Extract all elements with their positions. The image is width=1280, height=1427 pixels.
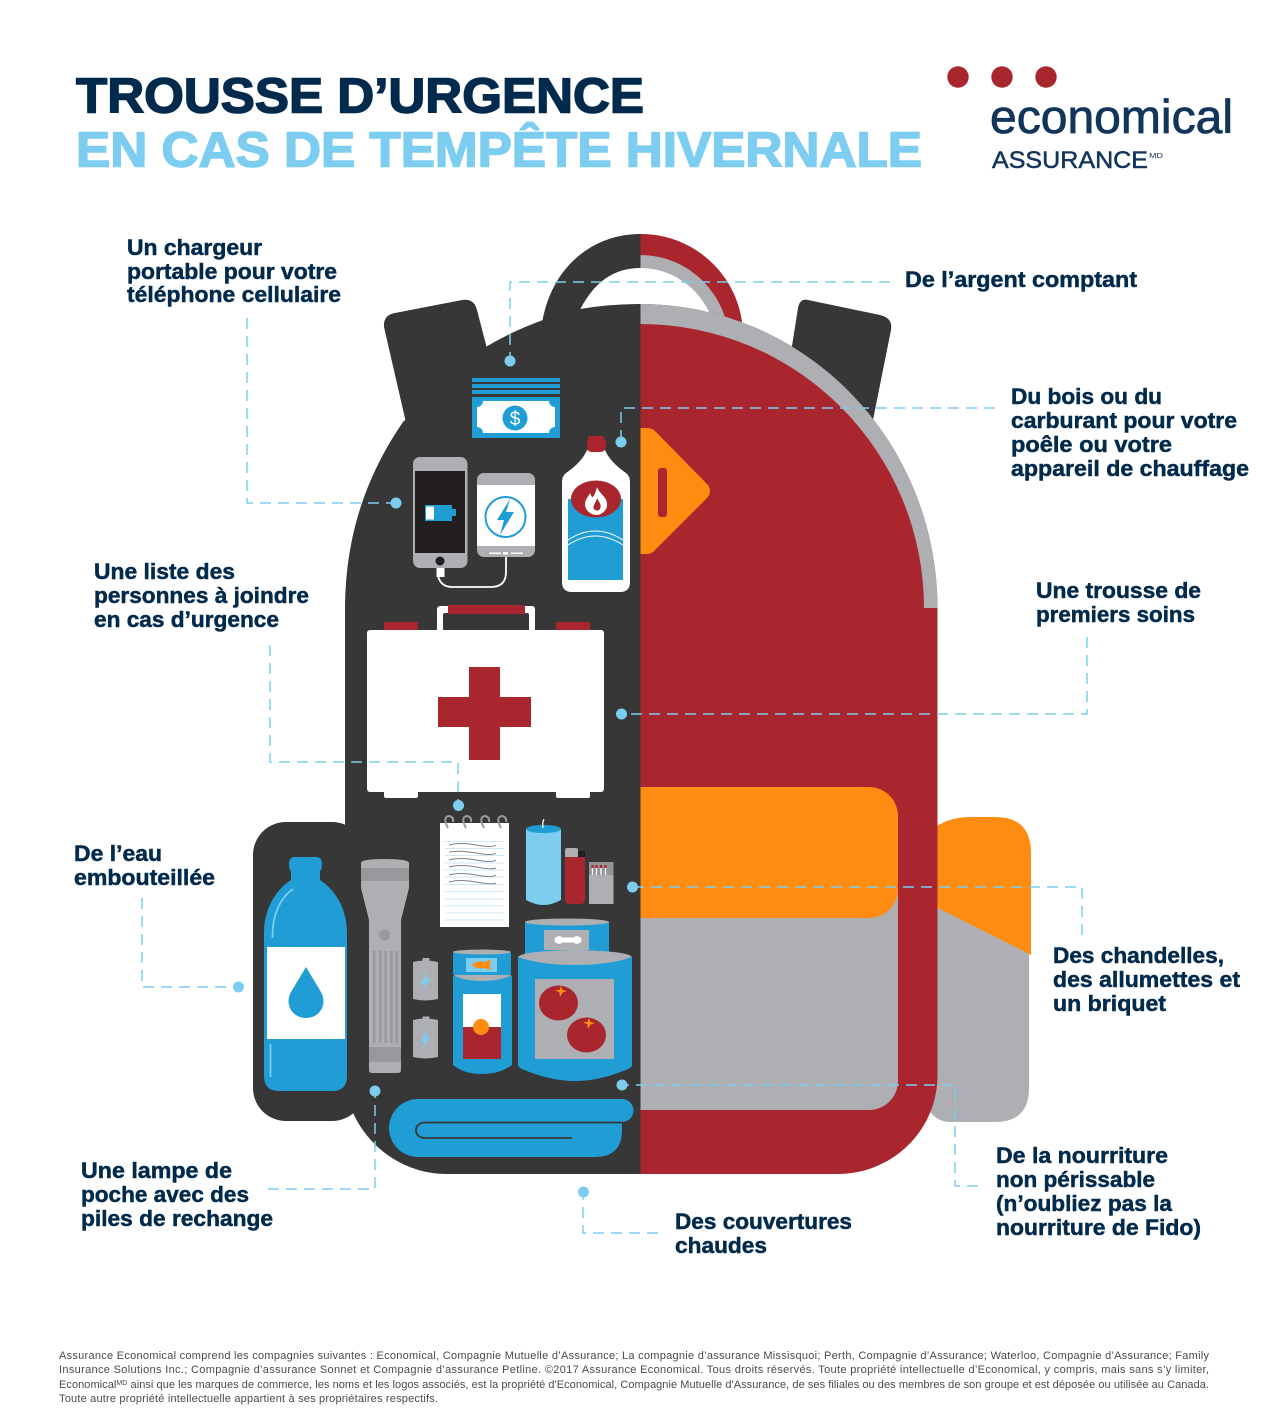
icon: power bank [477, 473, 535, 557]
footer legal text: Economical [59, 1379, 116, 1391]
icon: fish food can [453, 950, 511, 975]
label: bottled water [74, 841, 215, 890]
icon: candle [526, 819, 561, 905]
logo: Economical Assurance [947, 66, 1233, 174]
label: charger: Un chargeur [127, 235, 262, 260]
icon: tomato can [518, 950, 632, 1081]
icon: cash: $ [510, 409, 521, 430]
label: bottled water: embouteillée [74, 865, 215, 890]
icon: batteries [413, 958, 438, 1058]
orange zipper tab [640, 428, 710, 554]
label: charger: téléphone cellulaire [127, 282, 341, 307]
grey top trim [640, 304, 938, 608]
side pocket left [253, 822, 365, 1121]
label: flashlight: poche avec des [81, 1182, 249, 1207]
label: contact list: en cas d’urgence [94, 607, 279, 632]
icon: notepad [440, 816, 509, 927]
icon: matches [589, 862, 614, 904]
label: candles, matches, lighter: des allumettes et [1053, 967, 1241, 992]
icon: soup can [453, 974, 512, 1074]
label: first aid kit [1036, 578, 1201, 627]
label: cash: De l’argent comptant [905, 267, 1138, 292]
label: first aid kit: Une trousse de [1036, 578, 1201, 603]
label: food: De la nourriture [996, 1143, 1168, 1168]
label: blankets: chaudes [675, 1233, 767, 1258]
front pocket [640, 787, 898, 1110]
label: flashlight: piles de rechange [81, 1206, 273, 1231]
title [76, 70, 922, 178]
title: TROUSSE D’URGENCE [76, 70, 644, 124]
icon: first aid kit [367, 605, 604, 798]
label: blankets: Des couvertures [675, 1209, 852, 1234]
label: contact list: personnes à joindre [94, 583, 309, 608]
label: blankets [675, 1209, 852, 1258]
icon: lighter [565, 848, 585, 904]
icon: charging cable [436, 553, 506, 587]
label: food: nourriture de Fido) [996, 1215, 1201, 1240]
label: food: non périssable [996, 1167, 1155, 1192]
icon: dog food can [525, 918, 609, 954]
label: food [996, 1143, 1201, 1240]
icon: phone [413, 457, 468, 568]
icon: flashlight [361, 859, 409, 1073]
label: wood or fuel: appareil de chauffage [1011, 456, 1249, 481]
backpack [253, 234, 1031, 1174]
logo: Economical Assurance: economical [990, 90, 1233, 143]
connector lines [142, 282, 1087, 1233]
footer legal text: MD [116, 1380, 127, 1387]
footer legal text: Assurance Economical comprend les compagnies suivantes : Economical, Compagnie Mutuelle d’Assurance; La compagnie d’assurance Missisquoi; Perth, Compagnie d’Assurance; Waterloo, Compagnie d’Assurance; Family [59, 1350, 1210, 1362]
footer legal text: Toute autre propriété intellectuelle appartient à ses propriétaires respectifs. [59, 1393, 438, 1405]
straps [384, 300, 891, 440]
label: wood or fuel [1011, 384, 1249, 481]
label: contact list: Une liste des [94, 559, 235, 584]
icon: water bottle [264, 857, 347, 1091]
side pocket right [925, 817, 1031, 1122]
label: candles, matches, lighter: Des chandelles, [1053, 943, 1224, 968]
label: flashlight: Une lampe de [81, 1158, 232, 1183]
label: charger [127, 235, 341, 307]
body left half [345, 304, 640, 1174]
label: flashlight [81, 1158, 273, 1231]
icon: fuel bottle [562, 436, 630, 592]
label: candles, matches, lighter [1053, 943, 1241, 1016]
footer legal text: Insurance Solutions Inc.; Compagnie d’assurance Sonnet et Compagnie d’assurance Petline. ©2017 Assurance Economical. Tous droits réservés. Toute propriété intellectuelle d’Economical, y compris, mais sans s’y limiter, [59, 1364, 1209, 1376]
icon: blanket [389, 1099, 634, 1157]
footer legal text: ainsi que les marques de commerce, les noms et les logos associés, est la propriété d'Economical, Compagnie Mutuelle d'Assurance, de ses filiales ou des membres de son groupe et est déposée ou utilisée au Canada. [127, 1379, 1209, 1391]
footer legal text [59, 1350, 1210, 1405]
label: wood or fuel: Du bois ou du [1011, 384, 1162, 409]
label: wood or fuel: carburant pour votre [1011, 408, 1237, 433]
title: EN CAS DE TEMPÊTE HIVERNALE [76, 122, 922, 178]
label: first aid kit: premiers soins [1036, 602, 1195, 627]
label: candles, matches, lighter: un briquet [1053, 991, 1167, 1016]
label: wood or fuel: poêle ou votre [1011, 432, 1172, 457]
icon: cash [472, 378, 560, 438]
logo: Economical Assurance: ASSURANCE [992, 147, 1148, 174]
label: charger: portable pour votre [127, 259, 337, 284]
handle [541, 234, 743, 344]
label: bottled water: De l’eau [74, 841, 162, 866]
label: food: (n’oubliez pas la [996, 1191, 1172, 1216]
logo: Economical Assurance: MD [1149, 151, 1164, 160]
body right half [640, 304, 938, 1174]
label: contact list [94, 559, 309, 632]
